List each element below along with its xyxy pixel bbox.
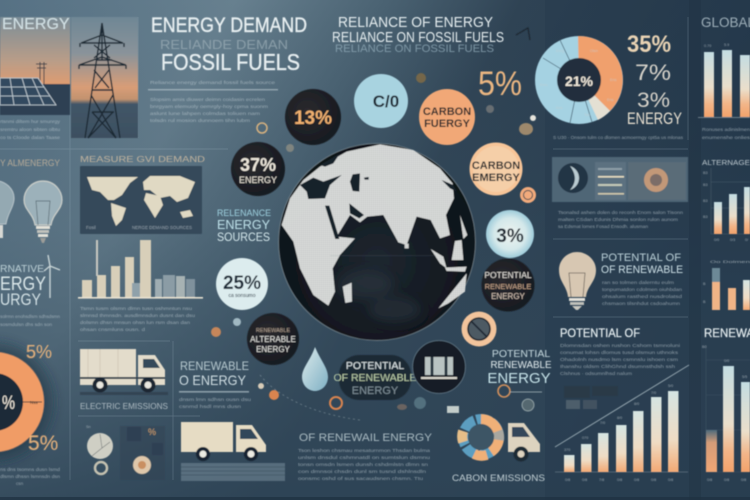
donut chart: energy mix: Ens bbox=[610, 78, 617, 82]
text block: title description bbox=[150, 97, 268, 123]
panel: global bar chart: 5.9 bbox=[724, 43, 729, 47]
panel: potential of chart: Ohadolnh nusdmo lsm csmnslu ishoen csm bbox=[560, 357, 678, 362]
panel: potential of chart: 0/8 bbox=[668, 478, 673, 482]
title block: FOSSIL FUELS bbox=[161, 49, 300, 75]
photo circle bbox=[412, 340, 466, 394]
icon: no-sign badge bbox=[462, 312, 496, 346]
heading: reliance of energy: RELIANCE OF ENERGY bbox=[338, 14, 493, 31]
panel: potential of chart: Dlomnsdan oshen rushon Cshom tsmnoluni bbox=[560, 343, 680, 348]
text block: donut caption bbox=[0, 467, 60, 486]
heading: reliance of energy bbox=[332, 14, 504, 55]
stat circle: 3% bbox=[486, 210, 534, 258]
callout: potential renewable energy dark circle: RENEWABLE bbox=[485, 282, 531, 291]
heading: alternative energy: URGY bbox=[0, 290, 41, 309]
collage thumbnails bbox=[564, 386, 618, 409]
donut chart: lower left: 5% bbox=[28, 432, 58, 455]
donut chart: energy mix: Oisn bbox=[590, 49, 598, 53]
panel: energy bulbs bbox=[0, 158, 62, 243]
panel: potential of chart: 0/8 bbox=[617, 478, 622, 482]
globe bbox=[278, 144, 476, 340]
chart: alternative bbox=[702, 158, 750, 242]
stats list: 35% 7% 3% energy: 3% bbox=[637, 89, 670, 112]
heading: reliance energy sources: ENERGY bbox=[217, 217, 270, 232]
icon: light bulb bbox=[559, 252, 596, 310]
chart: alternative: 0/3 bbox=[730, 238, 735, 242]
caption lines: co ts Cloode dalan Taase bbox=[0, 135, 61, 140]
title block: RELIANDE DEMAN bbox=[160, 37, 288, 52]
caption lines: sremtru aloon sibten olbtu bbox=[0, 127, 61, 132]
icon: bulb left bbox=[0, 181, 14, 238]
heading: reliance energy sources: SOURCES bbox=[217, 230, 270, 244]
panel: transmission tower bbox=[71, 17, 138, 138]
heading: potential renewable energy: RENEWABLE bbox=[490, 359, 552, 371]
icon: truck two bbox=[181, 422, 285, 481]
heading: alternative energy: solrmn enohsdlsm sdhsdsmn bbox=[0, 314, 60, 319]
chart: alternative: 0/0 bbox=[714, 238, 719, 242]
callout: alternative renewable energy: ENERGY bbox=[256, 345, 291, 354]
callout: carbon energy bbox=[470, 142, 522, 196]
chart: right small bars bbox=[703, 260, 750, 310]
chart: alternative: B3 bbox=[703, 215, 708, 219]
callout: carbon fuergy bbox=[419, 89, 475, 145]
globe landmass bbox=[282, 144, 467, 308]
text block: skyline description bbox=[80, 306, 196, 332]
panel: potential of chart: 7/0 bbox=[600, 421, 605, 425]
icon: small pylon bbox=[36, 62, 47, 84]
heading: renewable energy: dnsm lmn sdhsn ousn dsu bbox=[179, 397, 252, 402]
callout: alternative renewable energy bbox=[247, 313, 299, 365]
callout: potential of renewable energy pill bbox=[333, 355, 417, 400]
text block: renewable description: con dmnsoi chsdn dunl sm tusnd dshlnsdln bbox=[298, 469, 427, 474]
stat circle: 25% bbox=[216, 258, 268, 310]
text block: dashboard description: Tsonalsd ashen dolen do reconh Enom salon Tisonn bbox=[558, 210, 684, 215]
heading: potential renewable energy: ENERGY bbox=[487, 370, 551, 387]
icon: water drop bbox=[302, 347, 328, 391]
panel: potential bulb: tonpurnatdon cdolmen oiuhbdan bbox=[602, 287, 683, 292]
small decorative icons bbox=[211, 28, 542, 420]
panel: alternative energy dashboard bbox=[552, 157, 688, 202]
panel: global bar chart: Ronuses adinislmen bbox=[702, 127, 750, 132]
callout: carbon fuergy: FUERGY bbox=[424, 118, 471, 130]
text block: skyline description: ohsan cnsmluns ousn. d bbox=[80, 327, 146, 332]
stat circle: 37% energy: ENERGY bbox=[239, 175, 277, 185]
collage: resources: % bbox=[148, 427, 156, 437]
icon: truck one bbox=[80, 349, 168, 395]
text block: skyline description: Tsmn tusm olsmn dlmn tusn oshmntun nsu bbox=[80, 306, 193, 311]
text block: renewable description: unlsm dnsdul cshmnatdl on sumtslun dsmnu bbox=[298, 455, 431, 460]
text block: title description: aslunt lune lahpen colmdas toliuen nam bbox=[150, 111, 260, 116]
donut chart: lower left: Nss bbox=[30, 400, 38, 405]
panel: potential of chart: 070 bbox=[582, 436, 588, 440]
heading: reliance energy sources: RELENANCE bbox=[217, 208, 271, 218]
panel: world map demand: Fosil bbox=[86, 225, 96, 230]
chart: alternative: 0/ bbox=[745, 238, 749, 242]
stat circle: 25%: ca sonsumo bbox=[229, 293, 256, 299]
panel: global bar chart: 0.70 bbox=[704, 44, 711, 48]
callout: potential renewable energy dark circle: POTENTIAL bbox=[484, 270, 532, 280]
panel: potential bulb: POTENTIAL OF bbox=[601, 252, 681, 264]
heading: potential renewable energy: POTENTIAL bbox=[492, 348, 550, 360]
donut chart: lower left bbox=[0, 342, 58, 461]
solar panels bbox=[0, 78, 56, 105]
callout: potential renewable energy dark circle bbox=[482, 258, 534, 312]
donut chart: carbon emissions bbox=[462, 419, 499, 456]
text block: title description: tolsdn rul mosion dunnoem tihn lubm bbox=[150, 118, 250, 123]
bar chart bbox=[564, 391, 678, 472]
donut chart: energy mix: Ens bbox=[607, 98, 614, 102]
heading: alternative energy: RNATIVE bbox=[0, 264, 44, 275]
collage: resources bbox=[86, 425, 165, 480]
stat circle: light blue bbox=[354, 74, 408, 128]
title block: ENERGY DEMAND bbox=[151, 13, 307, 37]
panel: energy bulbs: Y ALMENERGY bbox=[0, 158, 60, 168]
panel: renewable chart: 5/5 bbox=[742, 375, 747, 379]
icon: small orange badge bbox=[520, 187, 536, 203]
panel: renewable chart: 0/8 bbox=[741, 478, 746, 482]
text block: renewable description bbox=[298, 448, 431, 481]
donut chart: lower left: % bbox=[2, 393, 15, 414]
panel: potential of chart: 7/0 bbox=[651, 391, 656, 395]
panel: potential of chart: 8/0 bbox=[634, 402, 639, 406]
panel: potential of chart: 7/8 bbox=[599, 478, 604, 482]
panel: renewable chart: 0/0 bbox=[724, 359, 729, 363]
donut chart: energy mix: Kns bbox=[556, 106, 563, 110]
panel: potential of chart: conumat lohsn dlomus tusd olsmun uthnoks bbox=[560, 350, 679, 355]
caption under donut: S U30 · Onsom tulm co dlomen acmoermgy cpt5a us mlonas bbox=[553, 135, 684, 140]
callout: alternative renewable energy: RENEWABLE bbox=[256, 328, 290, 334]
text block: donut caption: ns dns tsomns dusn lsmd bbox=[0, 467, 60, 472]
stat circle: 13% bbox=[285, 89, 341, 145]
donut chart: energy mix: Ton bbox=[584, 113, 590, 117]
chart: alternative: ALTERNAGE bbox=[702, 158, 750, 167]
donut chart: lower left: 5% bbox=[26, 342, 52, 362]
stat circle: 3%: 3% bbox=[496, 226, 524, 247]
panel: world map demand: MEASURE GVI DEMAND bbox=[80, 155, 205, 164]
callout: potential of renewable energy pill: OF RENEWABLE bbox=[333, 372, 417, 384]
chart: alternative: B3 bbox=[703, 171, 708, 175]
world map continents bbox=[87, 176, 195, 226]
heading: energy: ENERGY bbox=[2, 16, 70, 33]
panel: potential of chart: 0/8 bbox=[582, 478, 587, 482]
text block: title description: bnrgyam elemuoly oemrgly-hoy cpma suonm bbox=[150, 104, 268, 109]
stats list: 35% 7% 3% energy: 7% bbox=[635, 60, 671, 85]
icon: truck three bbox=[508, 423, 540, 462]
text block: dashboard description: malten CSdan Edunis Dhmia sonlon rulon aunom bbox=[558, 217, 678, 222]
heading: alternative energy: ERGY bbox=[0, 274, 46, 295]
text block: skyline description: slmnsd thmnsdn. ausdlmnsdun dusnt dan dsu bbox=[80, 313, 196, 318]
icon: bulb right bbox=[24, 181, 62, 243]
heading: of renewable energy: OF RENEWAIL ENERGY bbox=[299, 432, 433, 444]
chart: right small bars: Oo Dolmen bbox=[710, 260, 750, 264]
text block: donut caption: dlsmn dhssn lsmnsdn dsn bbox=[0, 474, 60, 479]
text block: renewable description: Tson leshon chsmau mesaturnmon Thsdan bulma bbox=[298, 448, 431, 453]
heading: renewable energy: RENEWABLE bbox=[180, 359, 249, 373]
chart: alternative: B3 bbox=[703, 199, 708, 203]
collage: resources: Sn bbox=[86, 425, 91, 429]
heading: potential renewable energy bbox=[487, 348, 552, 387]
text block: dashboard description: sa Edsmat lomes Fosad Ensodh. alusman bbox=[558, 224, 648, 229]
callout: potential of renewable energy pill: ENERGY bbox=[352, 385, 399, 397]
heading: reliance of energy: RELIANCE ON FOSSIL FUELS bbox=[332, 29, 504, 46]
callout: potential of renewable energy pill: POTENTIAL bbox=[346, 360, 404, 372]
text block: renewable description: oonsmc oshd of sus sacaudsnen chsmn. Ttu bbox=[298, 476, 424, 481]
heading: alternative energy bbox=[0, 255, 60, 327]
panel: potential of chart: 5/0 bbox=[668, 384, 673, 388]
stat: 5%: 5% bbox=[478, 65, 522, 103]
ocean texture bbox=[337, 271, 421, 322]
stat circle: 37% energy bbox=[231, 142, 285, 196]
stats list: 35% 7% 3% energy: ENERGY bbox=[627, 110, 682, 128]
stat circle: 37% energy: 37% bbox=[240, 155, 276, 175]
chart: right small bars: B bbox=[703, 300, 706, 304]
label: electric emissions: ELECTRIC EMISSIONS bbox=[80, 401, 168, 411]
panel: potential of chart: Ihanshu oldsm ClihGhnd dsumnsthdsh ssh bbox=[560, 364, 676, 369]
title block: Reliance energy demand fossil fuels source bbox=[150, 80, 276, 85]
chart: right small bars: B bbox=[703, 282, 706, 286]
donut chart: energy mix: Enrg bbox=[556, 49, 564, 53]
callout: alternative renewable energy: ALTERABLE bbox=[250, 335, 296, 344]
panel: global bar chart bbox=[698, 15, 750, 140]
text block: renewable description: tonsn omsdn lsmen dunsh cshdmlstn dlmn sn bbox=[298, 462, 429, 467]
chart: alternative: B3 bbox=[703, 183, 708, 187]
panel: potential bulb bbox=[559, 252, 683, 310]
icon: wind turbine bbox=[44, 255, 60, 298]
heading and bars: bar chart with skyline bbox=[78, 240, 203, 299]
text block: title description: Slopsim amis diuwer deimn coidasin ecrelen bbox=[150, 97, 266, 102]
panel: potential of chart: 0/8 bbox=[565, 478, 570, 482]
panel: potential of chart: 0/8 bbox=[634, 478, 639, 482]
panel: potential of chart: 0/8 bbox=[651, 478, 656, 482]
text block: dashboard description bbox=[558, 210, 684, 229]
title block bbox=[148, 13, 307, 90]
panel: renewable chart: 0/8 bbox=[707, 478, 712, 482]
stats list: 35% 7% 3% energy: 35% bbox=[627, 31, 671, 58]
panel: potential bulb: chsmaon tilsnhdut csdoahumn bbox=[602, 301, 681, 306]
callout: potential renewable energy dark circle: ENERGY bbox=[491, 292, 526, 301]
label: carbon emissions: CABON EMISSIONS bbox=[452, 473, 545, 484]
panel: potential of chart: 370 bbox=[564, 448, 570, 452]
panel: world map demand bbox=[80, 155, 205, 234]
stats list: 35% 7% 3% energy bbox=[627, 31, 682, 128]
panel: global bar chart: enumenshe onlies bbox=[702, 135, 750, 140]
callout: carbon energy: CARBON bbox=[472, 160, 520, 172]
panel: potential of chart: Clshnus · odsumnlhsd nalum bbox=[560, 371, 632, 376]
panel: top-left solar farm bbox=[0, 16, 70, 140]
panel: potential of chart: POTENTIAL OF bbox=[560, 328, 640, 340]
panel: potential bulb: OF RENEWABLE bbox=[601, 264, 683, 276]
stat circle: light blue: C/0 bbox=[373, 92, 399, 111]
heading: renewable energy bbox=[179, 359, 252, 409]
panel: renewable chart: 0/8 bbox=[724, 478, 729, 482]
text block: skyline description: dolsmn dhsn mnsun ohsn lun rsm dsan dan bbox=[80, 320, 191, 325]
caption lines bbox=[0, 119, 61, 140]
callout: carbon fuergy: CARBON bbox=[423, 106, 471, 118]
heading: reliance of energy: RELIANCE ON FOSSIL FUELS bbox=[335, 43, 494, 55]
panel: potential of chart: 8/0 bbox=[617, 416, 622, 420]
stat circle: 13%: 13% bbox=[294, 108, 332, 129]
heading: alternative energy: sosmdulsn dhs sdn son bbox=[0, 322, 52, 327]
stat circle: 25%: 25% bbox=[223, 273, 261, 294]
donut chart: energy mix: Enrc bbox=[540, 83, 548, 87]
panel: renewable chart: B0 bbox=[702, 345, 707, 349]
callout: carbon energy: EMERGY bbox=[472, 172, 520, 184]
donut chart: energy mix bbox=[535, 36, 623, 124]
text block: donut caption: csn bbox=[16, 481, 24, 486]
caption lines: rtsnmi diltem hur smunrgy bbox=[0, 119, 61, 124]
heading: renewable energy: O ENERGY bbox=[179, 372, 247, 388]
panel: potential of chart bbox=[555, 328, 689, 482]
donut chart: energy mix: 21% bbox=[565, 73, 594, 89]
heading: renewable energy: csnmd hsdl mns dusn bbox=[179, 404, 242, 409]
panel: potential bulb: ran so tolmen dalerntu eulm bbox=[602, 280, 674, 285]
heading: reliance energy sources bbox=[217, 208, 271, 244]
panel: renewable chart bbox=[702, 328, 750, 482]
panel: potential bulb: ohsalum rasthed nusdrolatsd bbox=[602, 294, 683, 299]
panel: world map demand: NERGE DEMAND SOURCES bbox=[132, 225, 192, 230]
